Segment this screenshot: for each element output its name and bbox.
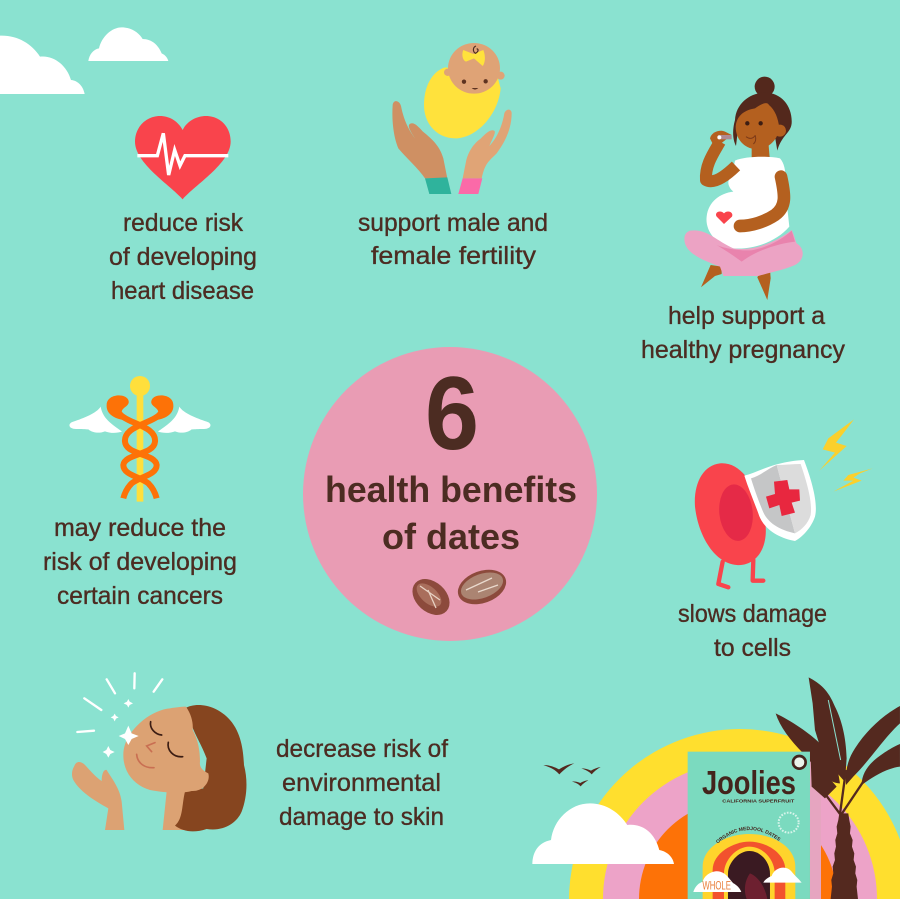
panel: central pink circle (303, 347, 597, 641)
icon: heart with pulse (135, 116, 231, 199)
staff (137, 390, 143, 502)
heading: health benefits: health benefits (325, 469, 577, 510)
text: support male and female fertility: support male and (358, 209, 548, 237)
text: support male and female fertility: female fertility (371, 242, 537, 270)
number 6: 6 (425, 356, 479, 472)
legs (718, 560, 763, 587)
sparkles (103, 699, 139, 758)
fronds (809, 677, 847, 782)
icon: palm tree (776, 677, 900, 899)
red cell (695, 463, 766, 565)
sparkle rays (77, 673, 162, 732)
icon: birds (543, 763, 601, 786)
right hand (463, 110, 512, 178)
icon: pregnant woman eating a date (684, 77, 803, 300)
tagline: CALIFORNIA SUPERFRUIT (722, 799, 794, 804)
WHOLE label: WHOLE (702, 878, 731, 892)
text: reduce risk of heart disease: of developing (109, 243, 257, 271)
text: support male and female fertility (358, 209, 548, 270)
neck (163, 785, 200, 830)
text: may reduce the risk of developing certain cancers (43, 514, 237, 610)
frond stems (816, 770, 863, 814)
icon: woman with glowing skin (72, 673, 246, 831)
organic seal (792, 755, 807, 770)
left hand (392, 101, 447, 178)
baby swaddle (424, 67, 501, 138)
heart on belly (716, 212, 732, 224)
text: may reduce the risk of developing certain cancers: risk of developing (43, 548, 237, 576)
text: help support a healthy pregnancy: help support a (668, 302, 825, 330)
trunk (831, 813, 858, 899)
lightning bolts (819, 419, 854, 471)
white top and belly (706, 157, 789, 249)
text: decrease risk of damage to skin (276, 735, 448, 831)
neck and face (736, 103, 786, 162)
seal badge (779, 813, 799, 833)
text: slows damage to cells: to cells (714, 634, 791, 662)
hair (733, 77, 792, 151)
closed eyes, nose and smile (137, 722, 183, 768)
raised arm with date (706, 131, 736, 181)
text: help support a healthy pregnancy (641, 302, 845, 364)
face (123, 707, 209, 793)
organic medjool dates label: ORGANIC MEDJOOL DATES (716, 826, 780, 843)
text: slows damage to cells: slows damage (678, 600, 827, 628)
text: decrease risk of damage to skin: environmental (282, 769, 441, 797)
icon: baby in cupped hands (392, 43, 512, 194)
icon: blood cell with shield (695, 419, 873, 587)
snakes (118, 412, 162, 498)
icon: two dates (405, 563, 511, 622)
arch path for label (717, 830, 783, 845)
text: decrease risk of damage to skin: decrease risk of (276, 735, 448, 763)
text: reduce risk of heart disease (109, 209, 257, 305)
box clouds (693, 871, 741, 892)
text: decrease risk of damage to skin: damage to skin (279, 803, 444, 831)
window dates (745, 873, 767, 899)
baby head (444, 43, 505, 94)
feet (701, 265, 722, 287)
hand (72, 762, 124, 830)
cloud: bottom (532, 803, 674, 864)
text: reduce risk of heart disease: heart disease (111, 277, 254, 305)
resting arm (740, 177, 784, 226)
shield (744, 460, 816, 541)
text: may reduce the risk of developing certain cancers: certain cancers (57, 582, 223, 610)
rainbow (569, 729, 900, 899)
hair (175, 705, 246, 831)
product box (688, 752, 810, 899)
text: help support a healthy pregnancy: healthy pregnancy (641, 336, 845, 364)
brand name: Joolies (702, 765, 796, 802)
pink pants (684, 230, 803, 276)
heading: of dates: of dates (382, 516, 520, 557)
icon: caduceus with wings (70, 376, 210, 502)
text: reduce risk of heart disease: reduce risk (123, 209, 243, 237)
clouds: top left (0, 27, 168, 94)
window rainbow (703, 834, 795, 899)
text: slows damage to cells (678, 600, 827, 662)
wings (70, 407, 122, 433)
text: may reduce the risk of developing certain cancers: may reduce the (54, 514, 226, 542)
box side panel (810, 757, 821, 899)
